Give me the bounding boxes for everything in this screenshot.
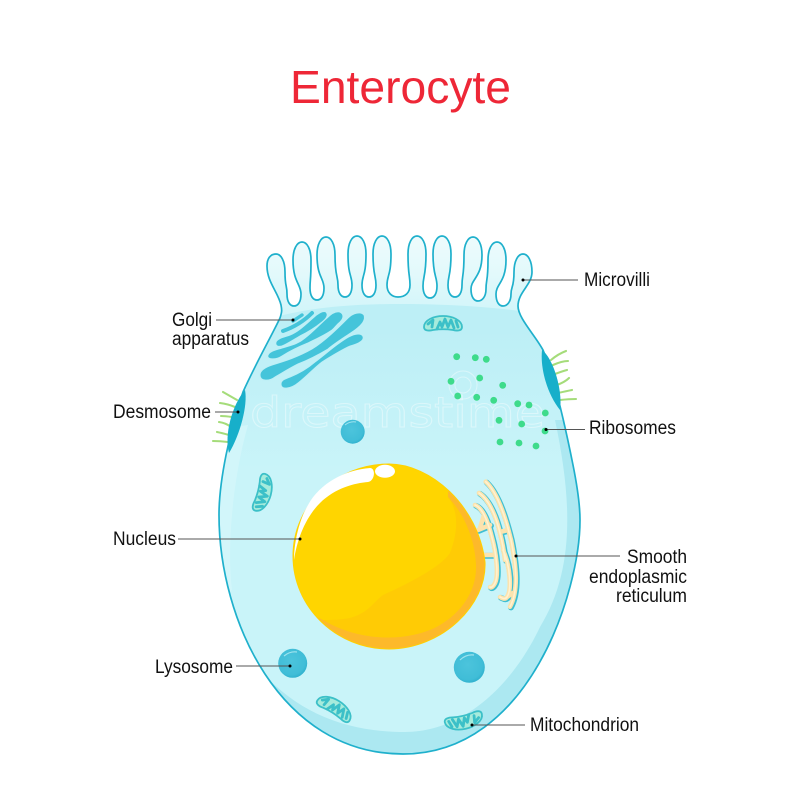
label: Nucleus: Nucleus <box>113 529 176 550</box>
icon: desmosome right <box>542 350 576 410</box>
label: Ribosomes <box>544 418 676 439</box>
label: Mitochondrion: Mitochondrion <box>530 715 639 736</box>
label: Smooth endoplasmic reticulum <box>514 547 687 607</box>
icon: mitochondrion top <box>424 316 462 331</box>
label: Golgi apparatus <box>172 310 294 350</box>
label: Golgi apparatus: Golgi <box>172 310 212 331</box>
icon: desmosome left <box>213 390 246 453</box>
cell: enterocyte <box>218 235 581 755</box>
label: Smooth endoplasmic reticulum: Smooth <box>627 547 687 568</box>
icon: mitochondrion lower left <box>315 691 355 724</box>
icon: mitochondrion lower right <box>444 710 484 733</box>
label: Desmosome: Desmosome <box>113 402 211 423</box>
icon: Golgi apparatus <box>260 311 365 388</box>
label: Microvilli: Microvilli <box>584 270 650 291</box>
watermark <box>250 371 545 437</box>
label: Lysosome <box>155 657 292 678</box>
icon: mitochondrion left <box>252 473 276 513</box>
label: Microvilli <box>522 270 650 291</box>
label: Nucleus <box>113 529 302 550</box>
label: Smooth endoplasmic reticulum: endoplasmic <box>589 567 687 588</box>
watermark: dreamstime <box>250 388 545 437</box>
icon: lysosome top <box>341 420 365 444</box>
label: Ribosomes: Ribosomes <box>589 418 676 439</box>
icon: nucleus <box>285 450 485 649</box>
icon: smooth endoplasmic reticulum <box>475 482 517 608</box>
ribosomes <box>448 353 549 449</box>
label: Lysosome: Lysosome <box>155 657 233 678</box>
label: Mitochondrion <box>470 715 639 736</box>
title: Enterocyte <box>290 61 511 113</box>
icon: lysosome left <box>278 649 307 678</box>
icon: lysosome right <box>454 652 485 683</box>
label: Golgi apparatus: apparatus <box>172 329 249 350</box>
label: Smooth endoplasmic reticulum: reticulum <box>616 586 687 607</box>
